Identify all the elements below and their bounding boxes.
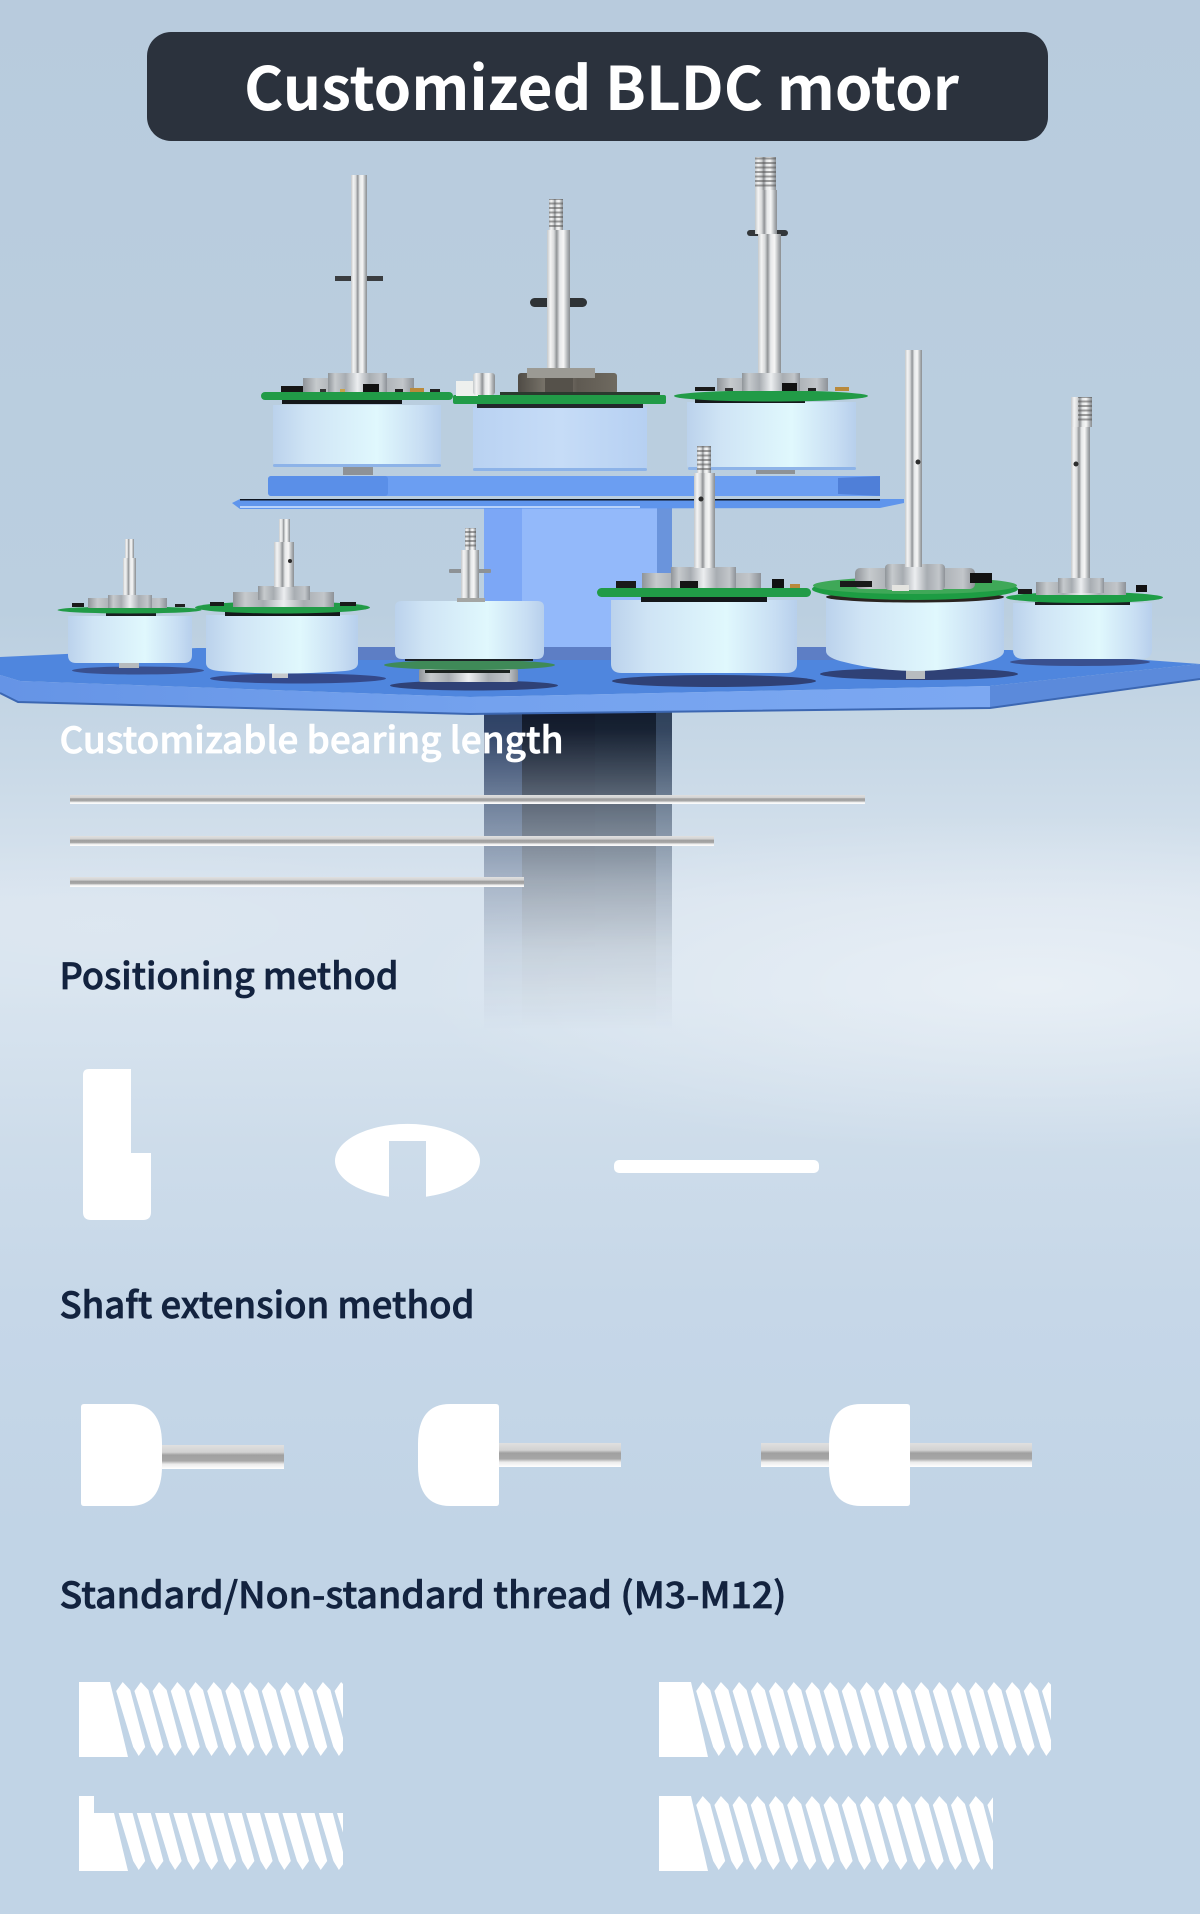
- title banner: [147, 32, 1048, 141]
- motor: lower centre right: [597, 446, 816, 687]
- motor: lower far left: [58, 539, 204, 674]
- positioning icons: [83, 1069, 819, 1220]
- icon: double shaft: [761, 1404, 1032, 1506]
- heading: thread: Standard/Non-standard thread (M3-M12): [60, 1567, 786, 1619]
- title: Customized BLDC motor: [244, 41, 960, 128]
- heading: bearing length: Customizable bearing length: [60, 712, 564, 764]
- motor: top right: [674, 157, 868, 474]
- motor: far right: [1006, 397, 1163, 666]
- icon: short thread with flat: [79, 1796, 364, 1871]
- motor: inverted centre: [384, 528, 558, 690]
- motor: top left: [261, 175, 453, 475]
- upper plate: [268, 476, 880, 496]
- shaft extension icons: [81, 1404, 1032, 1506]
- icon: long thread: [659, 1682, 1071, 1757]
- motor: top centre: [453, 199, 666, 471]
- bearing length rods: [70, 795, 865, 887]
- icon: flat bar: [614, 1160, 819, 1173]
- lower octagonal platform: [0, 647, 1200, 714]
- icon: stepped key: [83, 1069, 151, 1220]
- icon: slotted disc: [335, 1124, 480, 1197]
- upper column: [484, 505, 672, 655]
- motor: lower right large: [812, 350, 1018, 680]
- icon: single shaft from flat side: [418, 1404, 621, 1506]
- display stand: [0, 476, 1200, 714]
- icon: medium thread: [659, 1796, 1016, 1871]
- thread icons: [79, 1682, 1071, 1871]
- upper thin plate: [232, 499, 904, 509]
- motor: lower left: [195, 519, 386, 684]
- icon: single shaft right: [81, 1404, 284, 1506]
- heading: shaft extension method: Shaft extension method: [60, 1277, 475, 1329]
- icon: short thread: [79, 1682, 364, 1757]
- column fading below platform: [484, 712, 672, 1000]
- heading: positioning method: Positioning method: [60, 948, 398, 1000]
